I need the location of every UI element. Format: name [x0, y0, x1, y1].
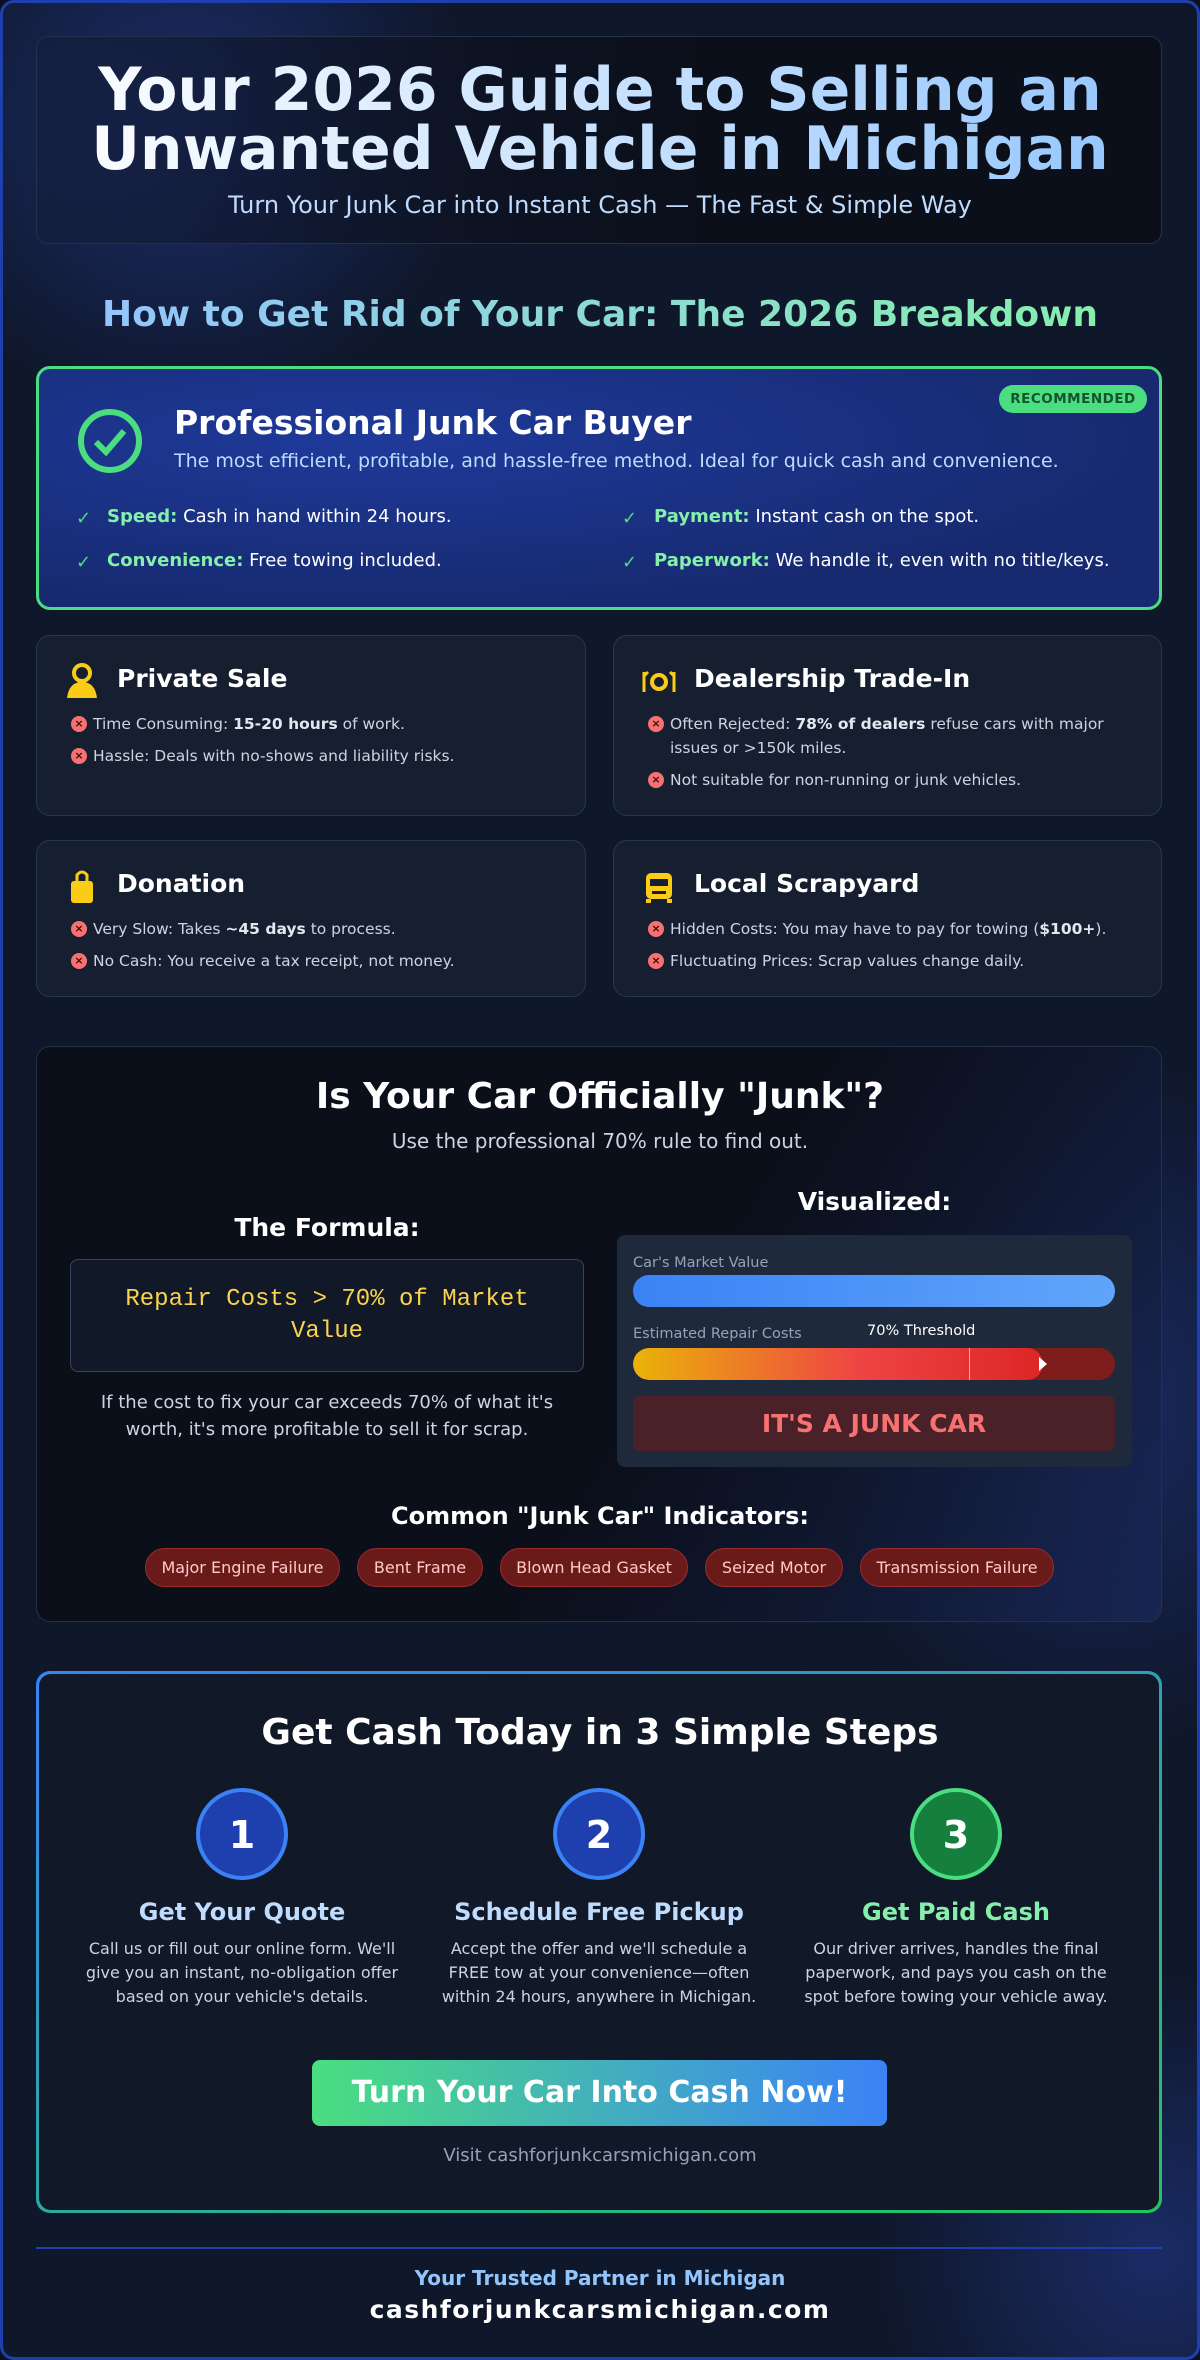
- formula box: [70, 1259, 584, 1372]
- benefits: ✓: [622, 552, 637, 573]
- step 1: Get Your Quote: [139, 1898, 345, 1926]
- panel: local scrapyard: Hidden Costs: You may have to pay for towing ($100+).: [670, 920, 1106, 938]
- step 2: 2: [586, 1813, 612, 1857]
- title: Unwanted Vehicle in Michigan: [91, 114, 1109, 184]
- visualized column: Visualized:: [798, 1187, 951, 1216]
- steps heading: Get Cash Today in 3 Simple Steps: [261, 1712, 939, 1753]
- formula column: [70, 1213, 584, 1440]
- benefits: Convenience: Free towing included.: [107, 550, 442, 571]
- benefits: ✓: [76, 552, 91, 573]
- description: The most efficient, profitable, and hassle-free method. Ideal for quick cash and convenience.: [174, 450, 1059, 472]
- badge: recommended: [999, 385, 1147, 413]
- panel: dealership trade-in: Dealership Trade-In: [694, 664, 970, 693]
- panel: donation: Very Slow: Takes ~45 days to process.: [93, 920, 396, 938]
- formula box: Repair Costs > 70% of Market: [125, 1286, 529, 1313]
- step 1: 1: [229, 1813, 255, 1857]
- chart: 70% rule bars: Car's Market Value: [633, 1255, 768, 1271]
- benefits: ✓: [622, 508, 637, 529]
- callout: junk car: IT'S A JUNK CAR: [762, 1409, 986, 1438]
- header panel: [36, 36, 1162, 244]
- step 3: 3: [943, 1813, 969, 1857]
- panel: local scrapyard: Fluctuating Prices: Scrap values change daily.: [670, 952, 1024, 970]
- formula box: Value: [291, 1318, 363, 1345]
- CTA button: Turn Your Car Into Cash Now!: [352, 2075, 847, 2110]
- panel: donation: No Cash: You receive a tax receipt, not money.: [93, 952, 455, 970]
- benefits: Payment: Instant cash on the spot.: [654, 506, 979, 527]
- chart: 70% rule bars: 70% Threshold: [867, 1323, 975, 1339]
- panel: dealership trade-in: [613, 635, 1162, 816]
- panel: local scrapyard: ×: [651, 922, 661, 935]
- subtitle: Turn Your Junk Car into Instant Cash — The Fast & Simple Way: [228, 191, 972, 219]
- panel: private sale: Time Consuming: 15-20 hours of work.: [93, 715, 405, 733]
- title: [37, 61, 1163, 179]
- icon: dealership: [642, 671, 676, 692]
- benefits: Speed: Cash in hand within 24 hours.: [107, 506, 452, 527]
- indicator pills: Transmission Failure: [876, 1558, 1038, 1577]
- badge: recommended: RECOMMENDED: [1010, 391, 1136, 407]
- section heading: How to Get Rid of Your Car: The 2026 Breakdown: [102, 294, 1098, 335]
- title: Your 2026 Guide to Selling an: [98, 55, 1102, 125]
- panel: private sale: ×: [74, 749, 84, 762]
- step 2: Accept the offer and we'll schedule a FREE tow at your convenience—often within 24 hours, anywhere in Michigan.: [442, 1939, 756, 2006]
- panel: private sale: Private Sale: [117, 664, 287, 693]
- panel: donation: [36, 840, 586, 997]
- benefits: [76, 506, 1110, 573]
- panel: 3 steps: [36, 1671, 1162, 2213]
- icon: car: [646, 873, 672, 903]
- panel: local scrapyard: [613, 840, 1162, 997]
- icon: person: [67, 663, 97, 698]
- footer: cashforjunkcarsmichigan.com: [370, 2295, 830, 2324]
- panel: donation: Donation: [117, 869, 245, 898]
- step 3: Get Paid Cash: [862, 1898, 1050, 1926]
- step 3: [804, 1788, 1108, 2006]
- indicator pills: Blown Head Gasket: [516, 1558, 672, 1577]
- card title: Professional Junk Car Buyer: [174, 403, 691, 442]
- panel: private sale: ×: [74, 717, 84, 730]
- panel: private sale: [36, 635, 586, 816]
- indicator pills: Seized Motor: [722, 1558, 826, 1577]
- panel: private sale: Hassle: Deals with no-shows and liability risks.: [93, 747, 455, 765]
- indicator pills: Major Engine Failure: [161, 1558, 324, 1577]
- chart: 70% rule bars: [617, 1235, 1132, 1467]
- icon: check circle: [78, 409, 142, 473]
- panel: professional junk car buyer: [36, 366, 1162, 610]
- footer: Your Trusted Partner in Michigan: [415, 2266, 785, 2290]
- step 2: [442, 1788, 756, 2006]
- callout: junk car: [633, 1396, 1115, 1451]
- CTA button: [312, 2060, 887, 2126]
- panel: dealership trade-in: Not suitable for non-running or junk vehicles.: [670, 771, 1021, 789]
- panel: is your car junk: [36, 1046, 1162, 1622]
- indicator pills: Bent Frame: [374, 1558, 466, 1577]
- panel: local scrapyard: Local Scrapyard: [694, 869, 919, 898]
- benefits: Paperwork: We handle it, even with no title/keys.: [654, 550, 1110, 571]
- indicators heading: Common "Junk Car" Indicators:: [391, 1502, 809, 1530]
- formula column: The Formula:: [234, 1213, 420, 1242]
- benefits: ✓: [76, 508, 91, 529]
- panel: dealership trade-in: Often Rejected: 78% of dealers refuse cars with major issues or >150k miles.: [670, 715, 1104, 757]
- visit text: Visit cashforjunkcarsmichigan.com: [443, 2145, 757, 2166]
- chart: 70% rule bars: Estimated Repair Costs: [633, 1326, 802, 1342]
- step 3: Our driver arrives, handles the final paperwork, and pays you cash on the spot before towing your vehicle away.: [804, 1939, 1108, 2006]
- step 2: Schedule Free Pickup: [454, 1898, 744, 1926]
- panel: local scrapyard: ×: [651, 954, 661, 967]
- formula column: If the cost to fix your car exceeds 70% of what it's: [101, 1392, 553, 1413]
- footer: [370, 2266, 830, 2324]
- indicator pills: [145, 1548, 1054, 1587]
- panel: dealership trade-in: ×: [651, 773, 661, 786]
- heading: Is Your Car Officially "Junk"?: [316, 1076, 884, 1117]
- icon: bag: [71, 870, 93, 903]
- formula column: worth, it's more profitable to sell it for scrap.: [126, 1419, 528, 1440]
- panel: donation: ×: [74, 922, 84, 935]
- step 1: Call us or fill out our online form. We'll give you an instant, no-obligation offer based on your vehicle's details.: [86, 1939, 398, 2006]
- panel: donation: ×: [74, 954, 84, 967]
- panel: dealership trade-in: ×: [651, 717, 661, 730]
- step 1: [86, 1788, 398, 2006]
- subheading: Use the professional 70% rule to find out.: [392, 1129, 808, 1153]
